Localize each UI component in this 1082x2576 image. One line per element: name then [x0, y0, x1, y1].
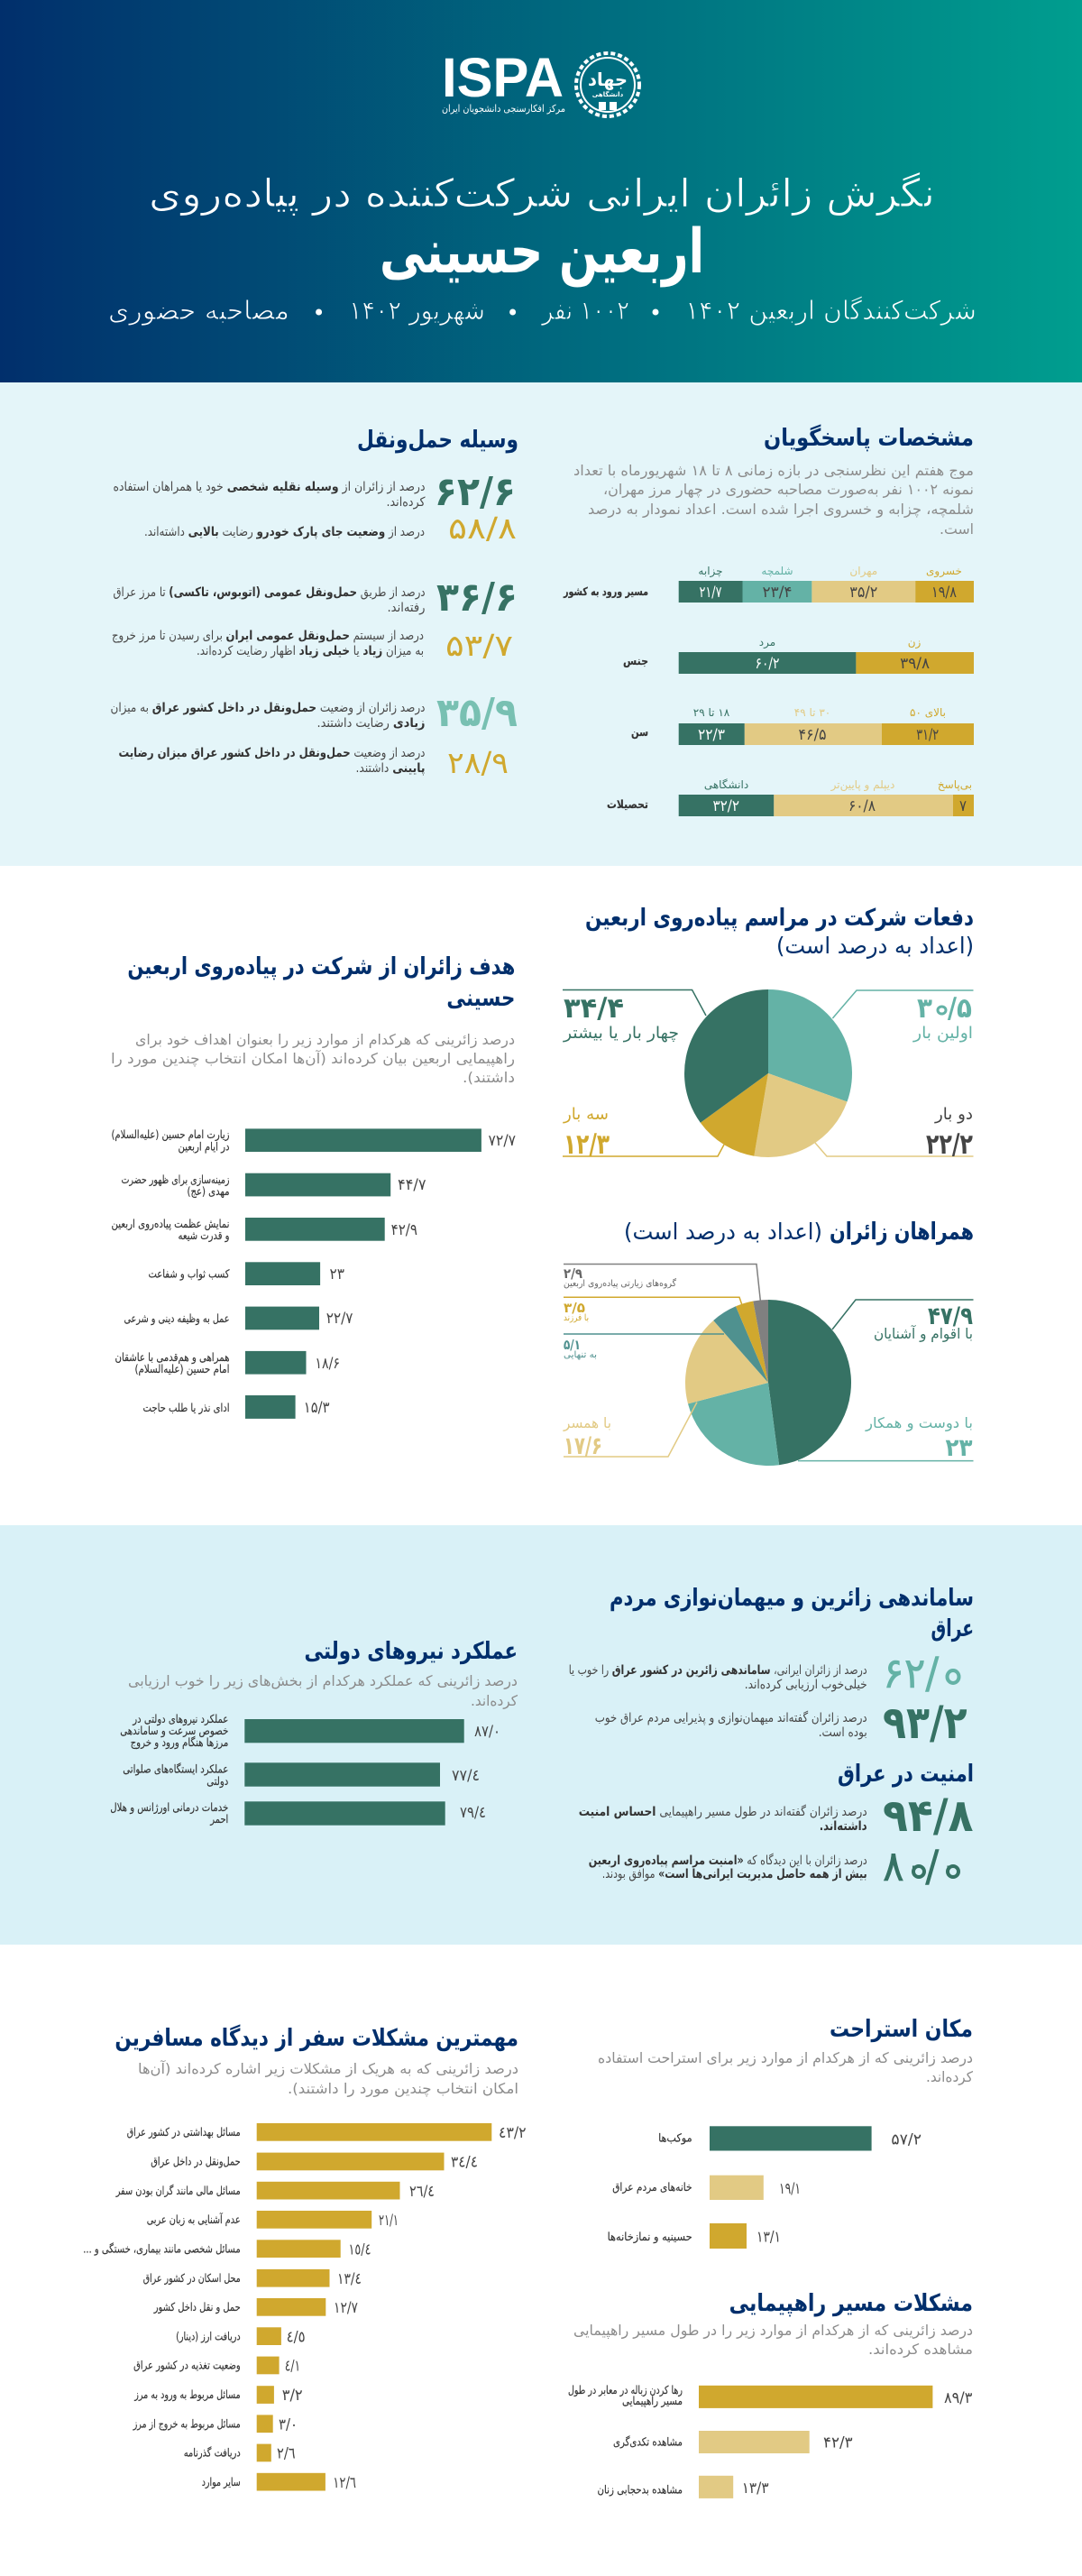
- callout: with children: ۳/۵: [564, 1300, 585, 1316]
- bar chart: route problems: ۱۳/۳: [742, 2479, 769, 2498]
- background: Iraq and government performance band: [0, 1525, 1082, 1945]
- bar chart: place of rest: ۵۷/۲: [891, 2130, 922, 2148]
- bar chart: route problems: ۸۹/۳: [944, 2389, 972, 2407]
- stacked bar: age: ۳۱/۲: [916, 726, 939, 744]
- bar chart: goals: در ایام اربعین: [179, 1140, 229, 1155]
- stacked bar: education: ۳۲/۲: [713, 797, 739, 815]
- text: travel problems description: [138, 2060, 518, 2098]
- text: survey description: نمونه ۱۰۰۲ نفر به‌صورت مصاحبه حضوری در چهار مرز مهران،: [603, 481, 974, 499]
- stat: organisation of pilgrims: ۶۲/۰: [883, 1649, 960, 1698]
- stacked bar: gender: زن: [908, 636, 922, 649]
- stacked bar: age: بالای ۵۰: [910, 706, 946, 719]
- callout: with relatives: با اقوام و آشنایان: [874, 1325, 973, 1343]
- bar chart: goals: [112, 1127, 516, 1419]
- bar chart: place of rest: خانه‌های مردم عراق: [612, 2180, 692, 2194]
- heading: place of rest: مکان استراحت: [830, 2016, 973, 2043]
- bar chart: route problems: مشاهده تکدی‌گری: [613, 2435, 683, 2450]
- header banner: [0, 0, 1082, 382]
- bar chart: travel problems: حمل‌ونقل در داخل عراق: [151, 2155, 241, 2169]
- bar chart: place of rest: موکب‌ها: [658, 2130, 692, 2145]
- stat: public transport: رفته‌اند.: [388, 601, 426, 615]
- bar chart: travel problems: مسائل مربوط به ورود به مرز: [133, 2387, 241, 2402]
- stat: public transport: [114, 575, 518, 621]
- bar chart: travel problems: حمل و نقل داخل کشور: [153, 2300, 241, 2314]
- bar chart: travel problems: ٤‎/‎٥: [287, 2328, 306, 2346]
- stat: Iraq transport low satisfaction: [118, 745, 509, 780]
- logo: Jahad seal: دانشگاهی: [592, 90, 624, 98]
- bar chart: travel problems: ٤‎/‎۱: [285, 2358, 300, 2376]
- bar chart: government services: عملکرد ایستگاه‌های صلواتی: [123, 1762, 228, 1777]
- heading: participation frequency: [585, 905, 974, 959]
- callout: with friends: ۲۳: [945, 1434, 973, 1462]
- stacked bar: education: بی‌پاسخ: [938, 778, 972, 791]
- panel: participation frequency: [563, 905, 974, 1161]
- heading: organisation and hospitality: [610, 1585, 974, 1642]
- bar chart: government services: دولتی: [206, 1774, 228, 1789]
- bar chart: travel problems: مسائل مربوط به خروج از مرز: [133, 2416, 241, 2431]
- text: route problems description: درصد زائرینی که از هرکدام از موارد زیر را در طول مسیر راهپیمایی: [573, 2322, 973, 2340]
- logo: ISPA wordmark: ISPA: [442, 47, 564, 108]
- stat: organisation of pilgrims: درصد از زائران ایرانی، ساماندهی زائرین در کشور عراق را خوب یا: [569, 1663, 867, 1678]
- stacked bar: entry route: شلمچه: [761, 565, 793, 577]
- bar chart: place of rest: ۱۳/۱: [756, 2228, 781, 2246]
- stat: Iraq transport low satisfaction: پایینی داشتند.: [355, 761, 426, 776]
- stacked bar: entry route: خسروی: [926, 565, 962, 578]
- bar chart: travel problems: ۱‎٥‎/‎٤: [348, 2240, 371, 2259]
- callout: three times: [563, 1105, 724, 1161]
- bar chart: travel problems: وضعیت تغذیه در کشور عراق: [133, 2359, 241, 2373]
- text: travel problems description: درصد زائرینی که به هریک از مشکلات زیر اشاره کرده‌اند (آن‌ها: [138, 2060, 518, 2078]
- bar chart: travel problems: محل اسکان در کشور عراق: [143, 2271, 241, 2286]
- callout: four or more: ۳۴/۴: [564, 992, 624, 1025]
- bar chart: goals: ۴۴/۷: [398, 1176, 426, 1194]
- stacked bar: education: دانشگاهی: [704, 778, 748, 791]
- text: survey description: شلمچه، چزابه و خسروی اجرا شده است. اعداد نمودار به درصد: [588, 501, 974, 519]
- stat: security attributed to Iranians: درصد زائران با این دیدگاه که «امنیت مراسم پیاده‌روی اربعین: [589, 1853, 867, 1868]
- title line: نگرش زائران ایرانی شرکت‌کننده در پیاده‌روی: [149, 171, 935, 216]
- stacked bar: age: ۱۸ تا ۲۹: [693, 706, 730, 719]
- bar chart: travel problems: ۱۲/۷: [334, 2299, 358, 2317]
- stat: feeling of security: داشته‌اند.: [820, 1819, 867, 1834]
- stat: feeling of security: [579, 1789, 974, 1842]
- stat: hospitality: درصد زائران گفته‌اند میهمان‌نوازی و پذیرایی مردم عراق خوب: [595, 1710, 867, 1725]
- bar chart: place of rest: [608, 2126, 922, 2249]
- stacked bar: entry route: ۳۵/۲: [849, 584, 877, 602]
- stacked bar: education: دیپلم و پایین‌تر: [830, 778, 894, 792]
- heading: transport: وسیله حمل‌ونقل: [357, 427, 518, 454]
- panel: pilgrims' goals: [111, 953, 516, 1419]
- background: respondents and transport band: [0, 382, 1082, 866]
- heading: goals: هدف زائران از شرکت در پیاده‌روی اربعین: [127, 953, 515, 980]
- callout: with spouse: ۱۷/۶: [564, 1432, 602, 1460]
- heading: companions: همراهان زائران: [830, 1219, 974, 1246]
- panel: travel problems: [83, 2024, 527, 2492]
- callout: two times: ۲۲/۲: [926, 1128, 973, 1161]
- stacked bar: entry route: [563, 565, 974, 603]
- callout: four or more: [563, 990, 706, 1043]
- survey facts row: مصاحبه حضوری: [108, 295, 289, 326]
- stacked bar: entry route: ۱۹/۸: [931, 584, 957, 602]
- bar chart: travel problems: دریافت گذرنامه: [184, 2446, 241, 2461]
- stat: security attributed to Iranians: ۸۰/۰: [883, 1842, 960, 1891]
- bar chart: goals: ۱۵/۳: [304, 1399, 330, 1417]
- bar chart: travel problems: ٤‎۳‎/‎۲: [499, 2124, 527, 2142]
- heading: organisation and hospitality: عراق: [931, 1615, 974, 1642]
- stat: Iraq transport low satisfaction: درصد از وضعیت حمل‌ونقل در داخل کشور عراق میزان رضایت: [118, 746, 425, 760]
- text: goals description: راهپیمایی اربعین بیان کرده‌اند (آن‌ها امکان انتخاب چندین مورد را: [111, 1050, 515, 1068]
- stacked bar: education: ۷: [959, 797, 967, 815]
- stat: feeling of security: ۹۴/۸: [883, 1789, 974, 1842]
- stat: organisation of pilgrims: خیلی‌خوب ارزیابی کرده‌اند.: [745, 1678, 867, 1692]
- bar chart: travel problems: مسائل بهداشتی در کشور عراق: [127, 2125, 241, 2139]
- stacked bar: age: [631, 706, 974, 745]
- bar chart: government services: خصوص سرعت و ساماندهی: [120, 1724, 228, 1738]
- heading: participation frequency: دفعات شرکت در مراسم پیاده‌روی اربعین: [585, 905, 974, 932]
- bar chart: goals: امام حسین (علیه‌السلام): [135, 1362, 229, 1376]
- text: government description: [128, 1672, 518, 1710]
- stacked bar: entry route: ۲۳/۴: [763, 584, 792, 602]
- panel: government forces performance: [110, 1638, 518, 1826]
- bar chart: government services: ۸۷/۰: [474, 1723, 500, 1741]
- callout: with children: با فرزند: [564, 1313, 589, 1323]
- text: survey description: است.: [940, 520, 974, 538]
- text: route problems description: مشاهده کرده‌اند.: [868, 2341, 973, 2359]
- title emphasis: اربعین حسینی: [380, 216, 704, 288]
- heading: organisation and hospitality: ساماندهی زائرین و میهمان‌نوازی مردم: [610, 1585, 974, 1612]
- callout: pilgrimage groups: [564, 1265, 760, 1302]
- heading: respondents: مشخصات پاسخگویان: [764, 424, 974, 452]
- logo: Jahad seal: جهاد: [588, 69, 628, 90]
- pie chart: companions: [685, 1300, 851, 1466]
- callout: with children: [564, 1297, 742, 1323]
- text: rest description: کرده‌اند.: [926, 2068, 973, 2086]
- bar chart: route problems: [568, 2383, 972, 2498]
- stat: organisation of pilgrims: [569, 1649, 960, 1698]
- text: survey description: موج هفتم این نظرسنجی در بازه زمانی ۸ تا ۱۸ شهریورماه با تعداد: [573, 462, 974, 480]
- callout: pilgrimage groups: ۲/۹: [564, 1265, 582, 1282]
- bar chart: travel problems: سایر موارد: [202, 2475, 241, 2489]
- bar chart: goals: و قدرت شیعه: [179, 1228, 229, 1243]
- stat: personal vehicle: درصد از زائران از وسیله نقلیه شخصی خود یا همراهان استفاده: [113, 480, 425, 494]
- callout: first time: ۳۰/۵: [917, 992, 972, 1025]
- survey facts row: شهریور ۱۴۰۲: [349, 295, 485, 326]
- bar chart: goals: کسب ثواب و شفاعت: [148, 1266, 230, 1281]
- callout: first time: اولین بار: [912, 1024, 973, 1043]
- panel: place of rest: [598, 2016, 973, 2249]
- bar chart: goals: همراهی و هم‌قدمی با عاشقان: [115, 1350, 229, 1365]
- stat: personal vehicle: کرده‌اند.: [386, 495, 426, 510]
- callout: pilgrimage groups: گروه‌های زیارتی پیاده‌روی اربعین: [564, 1278, 676, 1289]
- logo: Jahad seal: [576, 53, 639, 116]
- callout: with friends: با دوست و همکار: [865, 1414, 973, 1432]
- bar chart: travel problems: ۲‎/‎٦: [277, 2445, 296, 2463]
- bar chart: travel problems: ۳‎٤‎/‎٤: [451, 2154, 478, 2172]
- panel: companions: [563, 1219, 974, 1466]
- bar chart: goals: عمل به وظیفه دینی و شرعی: [124, 1311, 229, 1326]
- callout: with spouse: با همسر: [563, 1414, 611, 1432]
- bar chart: travel problems: [83, 2123, 527, 2492]
- stacked bar: gender: [623, 636, 974, 674]
- bar chart: government services: خدمات درمانی اورژانس و هلال: [110, 1800, 228, 1815]
- stacked bar: entry route: مسیر ورود به کشور: [563, 584, 648, 598]
- stat: personal vehicle: [113, 469, 516, 515]
- stat: Iraq transport low satisfaction: ۲۸/۹: [447, 745, 509, 780]
- heading: companions: [624, 1219, 974, 1246]
- bar chart: goals: ۴۲/۹: [391, 1221, 417, 1239]
- bar chart: government services: ۷‎۷‎/‎٤: [452, 1767, 480, 1785]
- stacked bar: education: ۶۰/۸: [848, 797, 876, 815]
- survey facts row: [108, 295, 977, 326]
- heading: travel problems: مهمترین مشکلات سفر از دیدگاه مسافرین: [115, 2024, 518, 2052]
- bar chart: travel problems: ۱‎۲‎/‎٦: [333, 2474, 356, 2492]
- text: government description: درصد زائرینی که عملکرد هرکدام از بخش‌های زیر را خوب ارزیابی: [128, 1672, 518, 1690]
- stat: parking satisfaction: [144, 511, 517, 546]
- heading: goals: [127, 953, 515, 1012]
- stat: public transport satisfaction: [112, 628, 513, 663]
- bar chart: travel problems: عدم آشنایی به زبان عربی: [147, 2213, 241, 2227]
- stat: hospitality: [595, 1697, 967, 1749]
- panel: respondent characteristics: [563, 424, 974, 816]
- callout: with relatives: ۴۷/۹: [928, 1302, 973, 1330]
- stacked bar: age: ۲۲/۳: [698, 726, 725, 744]
- bar chart: goals: ۲۲/۷: [326, 1310, 353, 1328]
- pie chart: participation frequency: [684, 989, 852, 1157]
- text: survey description: [573, 462, 974, 538]
- heading: government forces: عملکرد نیروهای دولتی: [305, 1638, 518, 1665]
- callout: first time: [832, 990, 974, 1043]
- bar chart: goals: زمینه‌سازی برای ظهور حضرت: [121, 1173, 229, 1187]
- bar chart: travel problems: ۲۱/۱: [379, 2212, 399, 2230]
- stat: personal vehicle: ۶۲/۶: [435, 469, 516, 515]
- bar chart: travel problems: دریافت ارز (دینار): [176, 2329, 241, 2343]
- stat: public transport: ۳۶/۶: [436, 575, 518, 621]
- stat: public transport satisfaction: به میزان زیاد یا خیلی زیاد اظهار رضایت کرده‌اند.: [197, 644, 424, 658]
- callout: alone: به تنهایی: [564, 1350, 597, 1360]
- bar chart: government services: ۷‎۹‎/‎٤: [460, 1804, 486, 1822]
- text: goals description: درصد زائرینی که هرکدام از موارد زیر را بعنوان اهداف خود برای: [135, 1031, 515, 1049]
- callout: with relatives: [832, 1300, 974, 1343]
- heading: goals: حسینی: [446, 985, 515, 1012]
- bar chart: government services: [110, 1712, 500, 1826]
- heading: participation frequency: (اعداد به درصد است): [776, 933, 974, 959]
- bar chart: place of rest: ۱۹/۱: [779, 2180, 801, 2198]
- stacked bar: entry route: ۲۱/۷: [700, 584, 721, 602]
- callout: alone: ۵/۱: [564, 1337, 581, 1353]
- bar chart: travel problems: ۲‎٦‎/‎٤: [409, 2183, 435, 2201]
- stacked bar: age: ۴۶/۵: [799, 726, 826, 744]
- callout: two times: دو بار: [934, 1105, 973, 1124]
- stacked bar: gender: مرد: [759, 636, 775, 649]
- callout: three times: سه بار: [563, 1105, 609, 1124]
- heading: security in Iraq: امنیت در عراق: [838, 1761, 974, 1788]
- stat: security attributed to Iranians: بیش از همه حاصل مدیریت ایرانی‌ها است» موافق بودند.: [602, 1867, 867, 1881]
- bar chart: route problems: مشاهده بدحجابی زنان: [597, 2483, 683, 2498]
- bar chart: travel problems: ۳/۰: [279, 2415, 298, 2433]
- stat: Iraq transport satisfied: درصد زائران از وضعیت حمل‌ونقل در داخل کشور عراق به میزان: [111, 701, 426, 715]
- stacked bar: gender: جنس: [623, 654, 648, 667]
- logo: ISPA wordmark: مرکز افکارسنجی دانشجویان ایران: [442, 103, 565, 115]
- text: route problems description: [573, 2322, 973, 2359]
- callout: four or more: چهار بار یا بیشتر: [563, 1024, 679, 1043]
- survey facts row: شرکت‌کنندگان اربعین ۱۴۰۲: [685, 295, 977, 326]
- stacked bar: education: تحصیلات: [607, 797, 648, 811]
- bar chart: goals: ۱۸/۶: [315, 1355, 340, 1373]
- callout: with friends: [798, 1414, 974, 1462]
- bar chart: route problems: مسیر راهپیمایی: [622, 2394, 683, 2408]
- stat: parking satisfaction: ۵۸/۸: [448, 511, 517, 546]
- stat: Iraq transport satisfied: زیادی رضایت داشتند.: [317, 716, 426, 731]
- bar chart: goals: ادای نذر یا طلب حاجت: [142, 1401, 229, 1415]
- survey facts row: ۱۰۰۲ نفر: [540, 295, 629, 326]
- stat: feeling of security: درصد زائران گفته‌اند در طول مسیر راهپیمایی احساس امنیت: [579, 1804, 867, 1819]
- bar chart: travel problems: مسائل شخصی مانند بیماری، خستگی و ...: [83, 2241, 241, 2256]
- stacked bar: gender: ۶۰/۲: [756, 655, 779, 673]
- stacked bar: education: [607, 778, 974, 816]
- bar chart: government services: مرزها هنگام ورود و خروج: [131, 1735, 228, 1750]
- bar chart: goals: زیارت امام حسین (علیه‌السلام): [112, 1127, 229, 1142]
- text: goals description: [111, 1031, 515, 1086]
- stacked bar: age: سن: [631, 725, 648, 739]
- stat: public transport: درصد از طریق حمل‌ونقل عمومی (اتوبوس، تاکسی) تا مرز عراق: [114, 585, 426, 600]
- bar chart: travel problems: مسائل مالی مانند گران بودن سفر: [115, 2184, 241, 2198]
- heading: route problems: مشکلات مسیر راهپیمایی: [729, 2290, 973, 2317]
- bar chart: goals: ۲۳: [330, 1265, 344, 1283]
- stacked bar: age: ۳۰ تا ۴۹: [794, 706, 830, 719]
- callout: with spouse: [563, 1403, 697, 1460]
- stat: public transport satisfaction: ۵۳/۷: [445, 628, 513, 663]
- stat: public transport satisfaction: درصد از سیستم حمل‌ونقل عمومی ایران برای رسیدن تا مرز خروج: [112, 629, 424, 643]
- stat: hospitality: ۹۳/۲: [883, 1697, 967, 1749]
- bar chart: government services: عملکرد نیروهای دولتی در: [132, 1712, 228, 1726]
- callout: two times: [815, 1105, 974, 1161]
- bar chart: route problems: رها کردن زباله در معابر در طول: [568, 2383, 683, 2397]
- bar chart: travel problems: ۱‎۳‎/‎٤: [337, 2270, 362, 2288]
- panel: transport: [111, 427, 518, 780]
- text: rest description: درصد زائرینی که از هرکدام از موارد زیر برای استراحت استفاده: [598, 2049, 973, 2067]
- text: goals description: داشتند).: [463, 1069, 515, 1086]
- panel: route problems: [568, 2290, 973, 2498]
- callout: three times: ۱۲/۳: [564, 1128, 610, 1161]
- callout: alone: [564, 1334, 724, 1360]
- bar chart: place of rest: حسینیه و نمازخانه‌ها: [608, 2230, 692, 2244]
- stat: hospitality: بوده است.: [819, 1725, 867, 1740]
- bar chart: route problems: ۴۲/۳: [823, 2433, 853, 2452]
- stacked bar: entry route: چزابه: [698, 565, 723, 578]
- bar chart: goals: ۷۲/۷: [489, 1132, 516, 1150]
- stat: Iraq transport satisfied: ۳۵/۹: [436, 690, 518, 736]
- bar chart: goals: نمایش عظمت پیاده‌روی اربعین: [112, 1217, 229, 1231]
- text: government description: کرده‌اند.: [471, 1692, 518, 1710]
- stacked bar: gender: ۳۹/۸: [900, 655, 930, 673]
- panel: organisation and hospitality in Iraq: [569, 1585, 974, 1891]
- stat: Iraq transport satisfied: [111, 690, 518, 736]
- stacked bar: entry route: مهران: [849, 565, 877, 578]
- bar chart: travel problems: ۳/۲: [282, 2387, 303, 2405]
- bar chart: government services: احمر: [210, 1812, 228, 1826]
- text: rest description: [598, 2049, 973, 2086]
- bar chart: goals: مهدی (عج): [188, 1184, 229, 1199]
- text: travel problems description: امکان انتخاب چندین مورد را داشتند).: [288, 2080, 518, 2098]
- stat: security attributed to Iranians: [589, 1842, 960, 1891]
- heading: companions: (اعداد به درصد است): [624, 1219, 822, 1245]
- stat: parking satisfaction: درصد از وضعیت جای پارک خودرو رضایت بالایی داشته‌اند.: [144, 525, 425, 539]
